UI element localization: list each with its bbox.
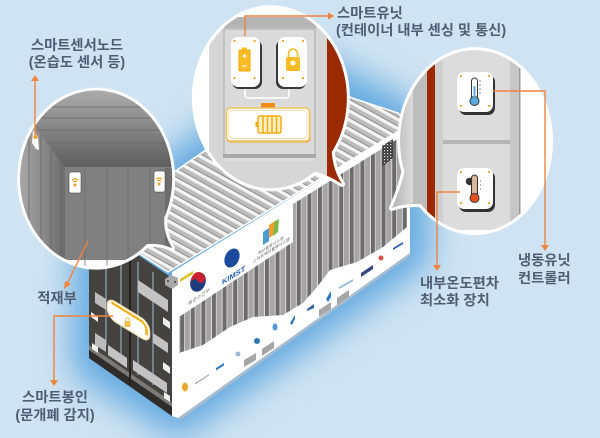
sensor node on back wall left xyxy=(69,172,81,193)
label: temperature device: 내부온도편차 xyxy=(420,275,499,292)
logo: KIMST: KIMST xyxy=(222,264,245,287)
sensor node on back wall right xyxy=(154,171,165,192)
QR code xyxy=(382,139,393,167)
controller unit with thermometer xyxy=(457,72,495,115)
logo: smart maritime logistics: 해상물류시스템 xyxy=(258,234,284,257)
label: smart sensor node xyxy=(29,37,125,71)
lock sensor unit xyxy=(276,37,307,89)
label: temperature device xyxy=(420,275,499,309)
container shadow glow xyxy=(72,50,430,438)
label: smart unit: 스마트유닛 xyxy=(337,5,403,22)
label: refrigeration controller: 냉동유닛 xyxy=(518,252,571,269)
label: smart seal xyxy=(15,389,95,424)
label: cargo area: 적재부 xyxy=(37,290,77,307)
label: refrigeration controller: 컨트롤러 xyxy=(518,270,571,287)
logo: smart maritime logistics xyxy=(253,219,290,265)
arrow: smart unit xyxy=(245,12,334,36)
smart seal on door xyxy=(108,297,150,343)
logo: ministry of oceans: 해양수산부 xyxy=(188,286,210,308)
label: smart unit xyxy=(336,5,506,39)
panel: controller bubble xyxy=(385,40,550,232)
connector wires xyxy=(245,89,289,98)
label: temperature device: 최소화 장치 xyxy=(420,292,490,309)
logo: KIMST xyxy=(221,246,245,287)
arrow: controller xyxy=(493,91,549,251)
arrow: sensor node xyxy=(31,75,39,135)
hazard strip xyxy=(180,271,193,282)
label: smart sensor node: (온습도 센서 등) xyxy=(29,54,125,71)
label: smart seal: 스마트봉인 xyxy=(22,389,88,406)
ceiling xyxy=(34,90,172,167)
red door edge xyxy=(327,38,347,184)
sensor node on left wall xyxy=(32,130,39,150)
shipping container xyxy=(89,70,410,420)
partner logos strip xyxy=(182,242,403,392)
arrow: smart seal xyxy=(50,316,113,386)
arrow: temperature device xyxy=(433,192,460,271)
arrow: cargo area xyxy=(64,241,88,289)
label: smart seal: (문개폐 감지) xyxy=(15,407,95,424)
logo: smart maritime logistics: 스마트해상물류시스템 xyxy=(253,235,290,265)
logo: ministry of oceans xyxy=(188,270,210,308)
container side wall xyxy=(172,124,410,420)
door face xyxy=(89,222,172,416)
label: smart unit: (컨테이너 내부 센싱 및 통신) xyxy=(336,22,506,39)
battery pack xyxy=(226,108,310,142)
corner casting xyxy=(165,275,178,289)
panel: interior cargo bubble xyxy=(17,88,176,270)
container roof xyxy=(90,70,410,272)
temperature deviation unit with thermometer xyxy=(457,168,495,212)
left wall xyxy=(20,128,65,259)
label: refrigeration controller xyxy=(518,252,571,287)
padlock icon xyxy=(124,318,130,327)
battery sensor unit xyxy=(231,37,262,89)
connector plug xyxy=(261,103,275,108)
panel: smart unit bubble xyxy=(195,8,360,200)
label: smart sensor node: 스마트센서노드 xyxy=(31,37,123,54)
